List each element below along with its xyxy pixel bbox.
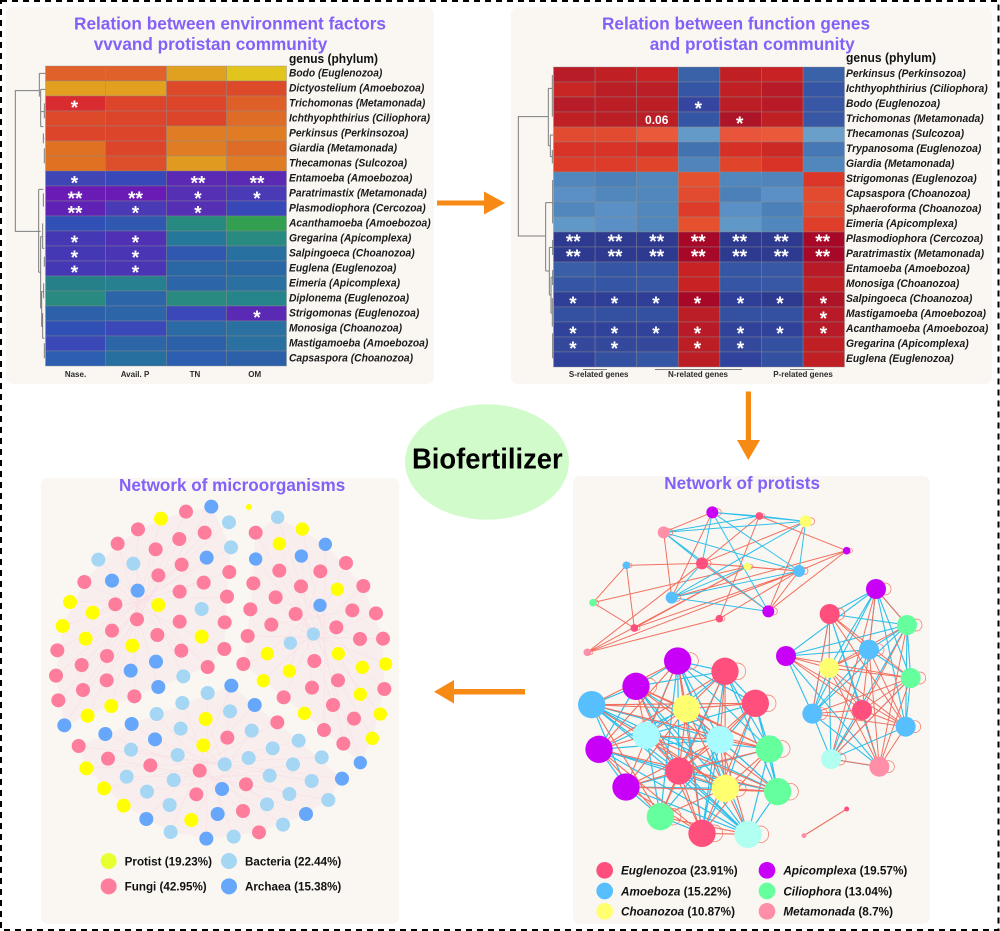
significance stars and values: function genes: 0.06 xyxy=(645,113,669,127)
genus labels: environment factors: Thecamonas (Sulcozoa) xyxy=(289,158,407,170)
legend: protist phyla: Euglenozoa (23.91%) xyxy=(621,864,738,878)
significance stars: environment factors: * xyxy=(253,189,261,210)
arrow: environment heatmap to gene heatmap xyxy=(437,192,505,214)
significance stars: environment factors: ** xyxy=(68,204,83,224)
genus labels: environment factors: Dictyostelium (Amoebozoa) xyxy=(289,82,425,94)
genus labels: function genes: Thecamonas (Sulcozoa) xyxy=(846,128,964,140)
legend: protist phyla xyxy=(596,862,907,920)
significance stars and values: function genes: ** xyxy=(608,247,623,268)
significance stars and values: function genes: * xyxy=(820,294,828,315)
genus labels: environment factors: Ichthyophthirius (Ciliophora) xyxy=(289,112,430,124)
significance stars and values: function genes: * xyxy=(652,294,660,315)
genus labels: function genes: Entamoeba (Amoebozoa) xyxy=(846,263,970,275)
genus labels: environment factors: Capsaspora (Choanozoa) xyxy=(289,352,413,364)
significance stars and values: function genes: ** xyxy=(774,247,789,268)
genus labels: function genes: Acanthamoeba (Amoebozoa) xyxy=(845,323,989,335)
legend: protist phyla: Choanozoa (10.87%) xyxy=(621,905,735,919)
significance stars and values: function genes: ** xyxy=(815,247,831,268)
significance stars: environment factors: * xyxy=(194,189,202,210)
genus labels: environment factors: Perkinsus (Perkinsozoa) xyxy=(289,128,409,140)
significance stars and values: function genes: * xyxy=(776,324,784,345)
significance stars: environment factors: * xyxy=(71,174,79,194)
arrow: network of protists to network of microorganisms xyxy=(434,680,525,704)
legend: microorganisms: Protist (19.23%) xyxy=(125,854,212,868)
significance stars and values: function genes: * xyxy=(652,324,660,345)
genus labels: environment factors xyxy=(288,52,431,364)
genus labels: function genes: Trichomonas (Metamonada) xyxy=(846,113,984,125)
genus labels: function genes: Sphaeroforma (Choanozoa) xyxy=(846,203,982,215)
panel: environment factors heatmap xyxy=(6,7,434,384)
genus labels: function genes: Eimeria (Apicomplexa) xyxy=(846,218,958,230)
significance stars and values: function genes: * xyxy=(737,324,745,345)
heatmap: environment factors xyxy=(46,66,286,366)
significance stars and values: function genes: ** xyxy=(649,232,665,253)
significance stars: environment factors: * xyxy=(71,98,79,119)
significance stars: environment factors: * xyxy=(132,204,140,224)
heading: environment factors: vvvand protistan community xyxy=(94,34,328,54)
genus labels: environment factors: Trichomonas (Metamonada) xyxy=(289,98,426,110)
column labels: environment factors: TN xyxy=(190,370,201,379)
significance stars and values: function genes: * xyxy=(611,324,619,345)
heading: function genes: and protistan community xyxy=(650,34,855,54)
legend: protist phyla: Ciliophora (13.04%) xyxy=(783,884,892,898)
significance stars and values: function genes: * xyxy=(736,114,744,135)
genus labels: function genes: Perkinsus (Perkinsozoa) xyxy=(846,68,966,80)
genus labels: environment factors: Gregarina (Apicomplexa) xyxy=(289,232,412,244)
legend: microorganisms: Fungi (42.95%) xyxy=(125,880,207,894)
heading: network of microorganisms: Network of microorganisms xyxy=(119,475,346,495)
significance stars and values: function genes: * xyxy=(569,324,577,345)
genus labels: function genes: Euglena (Euglenozoa) xyxy=(846,353,954,365)
nodes: fungi xyxy=(49,505,391,839)
significance stars and values: function genes xyxy=(566,99,831,360)
significance stars: environment factors: * xyxy=(71,263,79,284)
genus labels: environment factors: Euglena (Euglenozoa) xyxy=(289,262,397,274)
column labels: environment factors: Avail. P xyxy=(121,370,150,379)
panel: network of microorganisms xyxy=(41,475,399,924)
dendrogram: right heatmap xyxy=(518,75,553,358)
heading: function genes xyxy=(602,14,870,54)
legend: protist phyla: Metamonada (8.7%) xyxy=(783,905,893,919)
significance stars: environment factors: ** xyxy=(191,174,206,194)
module 1: small nodes xyxy=(583,506,852,656)
gene group labels: S-related genes xyxy=(569,370,629,379)
microorganism network graph xyxy=(49,500,392,846)
genus labels: function genes: Ichthyophthirius (Ciliophora) xyxy=(846,83,988,95)
significance stars and values: function genes: ** xyxy=(566,232,581,253)
genus labels: function genes: Mastigamoeba (Amoebozoa) xyxy=(846,308,986,320)
significance stars: environment factors: * xyxy=(132,263,140,284)
significance stars and values: function genes: * xyxy=(694,324,702,345)
significance stars: environment factors: * xyxy=(71,233,79,254)
legend: microorganisms xyxy=(101,853,341,894)
significance stars and values: function genes: * xyxy=(776,294,784,315)
significance stars: environment factors: ** xyxy=(128,189,143,210)
genus labels: function genes: Paratrimastix (Metamonada) xyxy=(846,248,984,260)
heatmap: function genes xyxy=(554,67,844,367)
arrow: gene heatmap to network of protists xyxy=(737,392,760,460)
genus labels: function genes: Plasmodiophora (Cercozoa) xyxy=(846,233,983,245)
heading: environment factors: Relation between environment factors xyxy=(74,14,386,34)
genus labels: function genes: Trypanosoma (Euglenozoa) xyxy=(846,143,982,155)
genus labels: function genes: Bodo (Euglenozoa) xyxy=(846,98,940,110)
genus labels: environment factors: Strigomonas (Euglenozoa) xyxy=(289,308,420,320)
significance stars and values: function genes: * xyxy=(737,294,745,315)
genus labels: environment factors: Bodo (Euglenozoa) xyxy=(289,68,383,80)
genus labels: environment factors: Entamoeba (Amoebozoa) xyxy=(289,172,413,184)
significance stars: environment factors: ** xyxy=(250,174,265,194)
genus labels: environment factors: Giardia (Metamonada) xyxy=(289,142,397,154)
gene group labels: N-related genes xyxy=(668,370,729,379)
significance stars and values: function genes: ** xyxy=(732,232,748,253)
module 2: medium nodes xyxy=(776,579,926,777)
significance stars and values: function genes: ** xyxy=(691,232,706,253)
significance stars: environment factors: * xyxy=(132,248,140,269)
significance stars and values: function genes: * xyxy=(694,339,702,360)
panel: network of protists xyxy=(573,473,930,924)
genus labels: environment factors: Eimeria (Apicomplexa) xyxy=(289,278,400,290)
significance stars and values: function genes: * xyxy=(820,324,828,345)
legend: protist phyla: Amoeboza (15.22%) xyxy=(620,884,731,898)
heading: function genes: Relation between function genes xyxy=(602,14,870,34)
genus labels: function genes: Capsaspora (Choanozoa) xyxy=(846,188,971,200)
significance stars: environment factors: * xyxy=(194,204,202,224)
column labels: environment factors: OM xyxy=(248,370,261,379)
significance stars and values: function genes: * xyxy=(737,339,745,360)
significance stars: environment factors: * xyxy=(253,308,261,329)
genus labels: function genes: Monosiga (Choanozoa) xyxy=(846,278,960,290)
significance stars: environment factors: * xyxy=(132,233,140,254)
protist network graph xyxy=(578,506,926,848)
genus labels: environment factors: Monosiga (Choanozoa) xyxy=(289,322,402,334)
genus labels: function genes: Salpingoeca (Choanozoa) xyxy=(846,293,973,305)
significance stars and values: function genes: ** xyxy=(649,247,665,268)
significance stars and values: function genes: * xyxy=(611,339,619,360)
gene group labels: P-related genes xyxy=(773,370,833,379)
significance stars and values: function genes: * xyxy=(820,309,828,330)
panel: function genes heatmap xyxy=(511,7,992,384)
column labels: environment factors xyxy=(65,370,261,379)
genus labels: environment factors: Paratrimastix (Metamonada) xyxy=(289,188,427,200)
nodes: bacteria xyxy=(91,511,335,844)
significance stars and values: function genes: ** xyxy=(774,232,789,253)
significance stars and values: function genes: ** xyxy=(691,247,706,268)
genus labels: function genes: genus (phylum) xyxy=(846,51,936,65)
significance stars and values: function genes: * xyxy=(611,294,619,315)
significance stars and values: function genes: * xyxy=(695,99,703,120)
genus labels: function genes: Giardia (Metamonada) xyxy=(846,158,955,170)
significance stars and values: function genes: * xyxy=(694,294,702,315)
genus labels: environment factors: Diplonema (Euglenozoa) xyxy=(289,292,409,304)
genus labels: environment factors: Salpingoeca (Choanozoa) xyxy=(289,248,415,260)
central ellipse: Biofertilizer xyxy=(405,404,569,520)
heading: environment factors xyxy=(74,14,386,54)
module 4: node pair xyxy=(801,806,849,838)
genus labels: environment factors: genus (phylum) xyxy=(289,52,378,66)
significance stars: environment factors: ** xyxy=(68,189,83,210)
genus labels: function genes: Gregarina (Apicomplexa) xyxy=(846,338,969,350)
legend: microorganisms: Bacteria (22.44%) xyxy=(245,854,341,868)
heading: network of protists: Network of protists xyxy=(664,473,820,493)
significance stars and values: function genes: ** xyxy=(815,232,831,253)
genus labels: function genes: Strigomonas (Euglenozoa) xyxy=(846,173,977,185)
significance stars and values: function genes: * xyxy=(569,294,577,315)
significance stars and values: function genes: * xyxy=(569,339,577,360)
significance stars and values: function genes: ** xyxy=(608,232,623,253)
legend: protist phyla: Apicomplexa (19.57%) xyxy=(782,864,907,878)
genus labels: function genes xyxy=(845,51,989,365)
nodes: archaea xyxy=(57,500,367,846)
nodes: protists xyxy=(56,504,392,827)
column labels: environment factors: Nase. xyxy=(65,370,86,379)
dendrogram: left heatmap xyxy=(15,73,45,358)
significance stars and values: function genes: ** xyxy=(566,247,581,268)
genus labels: environment factors: Mastigamoeba (Amoebozoa) xyxy=(289,338,429,350)
genus labels: environment factors: Plasmodiophora (Cercozoa) xyxy=(289,202,426,214)
genus labels: environment factors: Acanthamoeba (Amoebozoa) xyxy=(288,218,431,230)
significance stars and values: function genes: ** xyxy=(732,247,748,268)
legend: microorganisms: Archaea (15.38%) xyxy=(245,880,341,894)
significance stars: environment factors xyxy=(68,98,265,329)
module 3: large nodes xyxy=(578,647,798,848)
central ellipse: Biofertilizer: Biofertilizer xyxy=(412,444,563,476)
gene group labels xyxy=(569,370,833,379)
significance stars: environment factors: * xyxy=(71,248,79,269)
